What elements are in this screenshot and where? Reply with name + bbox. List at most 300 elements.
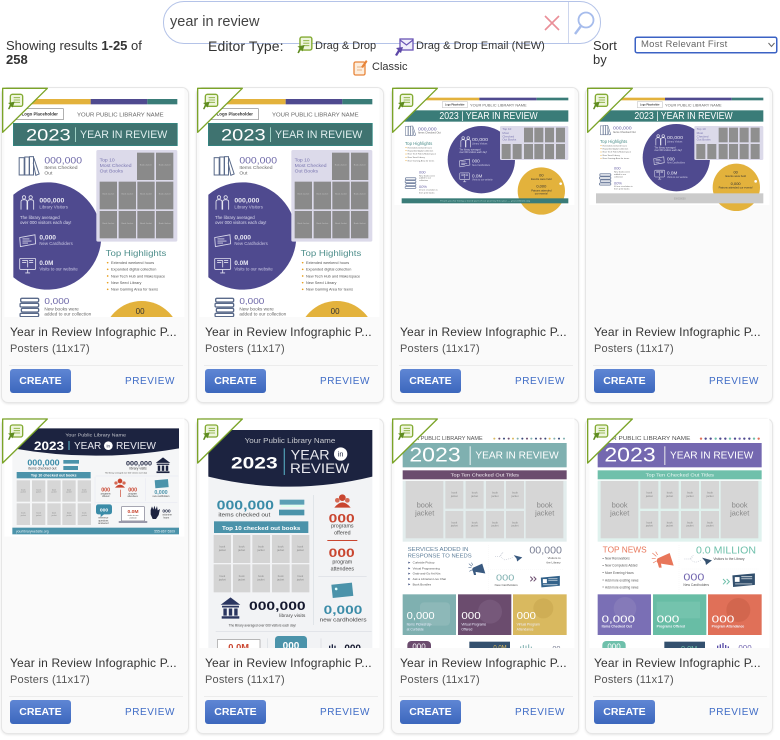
poster thumbnail: our events!	[535, 192, 548, 196]
poster thumbnail: Book Jacket	[297, 222, 310, 225]
create button	[205, 700, 266, 724]
poster thumbnail: YOUR PUBLIC LIBRARY NAME	[403, 436, 483, 442]
preview link: PREVIEW	[125, 376, 175, 387]
poster thumbnail: New Gaming Area for teens	[306, 288, 353, 292]
poster thumbnail: jacket	[20, 514, 26, 517]
poster thumbnail: jacket	[218, 548, 226, 552]
poster thumbnail: Expanded digital collection	[603, 147, 629, 150]
poster thumbnail: YOUR PUBLIC LIBRARY NAME	[77, 112, 164, 118]
sort dropdown	[635, 37, 777, 53]
poster thumbnail: New Cardholders	[667, 162, 686, 165]
poster thumbnail: Events were held	[531, 177, 552, 181]
poster thumbnail: jacket	[686, 494, 694, 498]
poster thumbnail: book	[646, 491, 653, 495]
poster thumbnail: book	[732, 501, 748, 510]
poster thumbnail: book	[82, 489, 86, 491]
poster thumbnail: jacket	[257, 577, 265, 581]
poster thumbnail: book	[21, 513, 25, 515]
poster thumbnail: book	[667, 520, 673, 524]
poster thumbnail: 2023	[26, 125, 71, 144]
poster thumbnail: book	[67, 513, 71, 515]
poster thumbnail	[197, 418, 380, 648]
preview link: PREVIEW	[709, 376, 759, 387]
create button: CREATE	[409, 706, 452, 718]
poster thumbnail: jacket	[450, 524, 458, 528]
poster thumbnail: program	[128, 492, 137, 495]
poster thumbnail: YOUR PUBLIC LIBRARY NAME	[665, 102, 722, 107]
poster thumbnail: 0,000	[239, 296, 265, 306]
search bar	[163, 1, 601, 44]
poster thumbnail: Most Checked	[100, 163, 132, 169]
poster thumbnail: collection	[614, 175, 624, 178]
poster thumbnail: Add more exciting news	[605, 585, 639, 589]
poster thumbnail: New books were	[239, 307, 274, 312]
poster thumbnail: questions	[98, 519, 109, 522]
poster thumbnail: RESPONSE TO NEEDS	[408, 553, 472, 559]
poster thumbnail: 000,000	[27, 458, 60, 467]
poster thumbnail: Book Jacket	[354, 222, 366, 225]
poster thumbnail: offered	[334, 530, 351, 536]
poster thumbnail: Items Checked	[44, 165, 78, 171]
poster thumbnail: Extended weekend hours	[603, 144, 627, 147]
poster thumbnail: Virtual Programming	[413, 566, 440, 570]
poster thumbnail: attendees	[331, 566, 354, 572]
poster thumbnail: Virtual Program	[517, 623, 540, 627]
preview link: PREVIEW	[515, 707, 565, 718]
card 8: purple and mint year in review poster	[586, 419, 772, 733]
poster thumbnail: New Tech Hub and Makerspace	[306, 274, 360, 278]
poster thumbnail: Book Jacket	[159, 193, 171, 196]
poster thumbnail: Most	[697, 131, 703, 135]
poster thumbnail: 000	[667, 156, 675, 161]
poster thumbnail: Top 10 checked out books	[31, 474, 76, 478]
search query text: year in review	[170, 14, 259, 30]
poster thumbnail: Library Visitors	[39, 204, 68, 209]
poster thumbnail: added to our	[419, 177, 431, 180]
poster thumbnail: jacket	[706, 524, 714, 528]
poster thumbnail: The library averaged	[459, 148, 481, 151]
poster thumbnail: Your Public Library Name	[245, 438, 335, 445]
poster thumbnail: 000	[712, 614, 735, 625]
card subtitle: Posters (11x17)	[205, 343, 285, 355]
poster thumbnail: Extended weekend hours	[408, 146, 432, 149]
poster thumbnail: Expanded digital collection	[306, 268, 351, 272]
poster thumbnail: Out	[239, 171, 248, 177]
poster thumbnail: 00	[136, 307, 145, 316]
poster thumbnail: Logo Placeholder	[217, 112, 253, 117]
poster thumbnail: New Seed Library	[603, 154, 621, 157]
poster thumbnail: Virtual Programs	[461, 623, 486, 627]
poster thumbnail: jacket	[470, 494, 478, 498]
poster thumbnail: 0.0M	[234, 260, 248, 267]
poster thumbnail: 00 are circulation is	[614, 185, 633, 188]
icon: clear search	[544, 16, 560, 30]
sort by label: Sort	[593, 38, 617, 53]
poster thumbnail: book	[297, 574, 304, 578]
dropdown value: Most Relevant First	[641, 39, 728, 50]
poster thumbnail: added to our collection	[44, 312, 92, 317]
poster thumbnail: Program Attendance	[712, 625, 744, 629]
poster thumbnail: book	[219, 574, 226, 578]
poster thumbnail: Out Books	[295, 169, 318, 175]
card 7: teal and plum year in review poster	[392, 419, 578, 733]
card title: Year in Review Infographic P...	[205, 325, 372, 339]
poster thumbnail: book	[707, 520, 714, 524]
create button	[10, 700, 71, 724]
poster thumbnail: 000	[472, 159, 480, 164]
poster thumbnail: book	[472, 491, 478, 495]
poster thumbnail: jacket	[609, 509, 629, 518]
poster thumbnail: YEAR IN REVIEW	[275, 129, 363, 141]
poster thumbnail: Thank you for being a loved part of our journey this year — yourwebsite.org	[440, 200, 531, 203]
poster thumbnail: book	[492, 491, 499, 495]
poster thumbnail: 000,000	[126, 460, 152, 467]
poster thumbnail: jacket	[511, 524, 519, 528]
poster thumbnail: jacket	[276, 548, 284, 552]
poster thumbnail: YOUR PUBLIC LIBRARY NAME	[272, 112, 359, 118]
icon: drag and drop	[298, 36, 313, 54]
poster thumbnail: collection	[419, 179, 429, 182]
poster thumbnail: YEAR	[74, 441, 101, 452]
poster thumbnail: 000	[162, 509, 171, 515]
poster thumbnail: in	[107, 443, 111, 448]
poster thumbnail: New Gaming Area for teens	[603, 157, 629, 160]
poster thumbnail: Top 10	[295, 157, 310, 163]
poster thumbnail: Top 10	[697, 127, 706, 131]
poster thumbnail: New Tech Hub & Makerspace	[603, 151, 632, 154]
poster thumbnail: Book Jacket	[335, 164, 347, 167]
poster thumbnail: from print books	[419, 191, 434, 194]
create button: CREATE	[19, 375, 62, 387]
poster thumbnail: Expanded digital collection	[408, 149, 434, 152]
poster thumbnail: new cardholders	[152, 495, 170, 498]
poster thumbnail: jacket	[35, 491, 42, 494]
poster thumbnail: Library Visitors	[234, 204, 263, 209]
card title: Year in Review Infographic P...	[10, 656, 177, 670]
poster thumbnail: Items Checked Out	[418, 131, 441, 135]
poster thumbnail: 0,000	[39, 234, 56, 241]
poster thumbnail: New books were	[44, 307, 79, 312]
card subtitle: Posters (11x17)	[594, 674, 674, 686]
poster thumbnail: Book Jacket	[121, 222, 134, 225]
create button: CREATE	[409, 375, 452, 387]
poster thumbnail: Top Highlights	[600, 139, 627, 144]
poster thumbnail: jacket	[20, 491, 26, 494]
poster thumbnail: 0,000	[324, 603, 363, 617]
poster thumbnail: book	[537, 501, 553, 510]
poster thumbnail: TOP NEWS	[603, 545, 647, 555]
poster thumbnail: Visitors to	[548, 556, 561, 560]
poster thumbnail: Most Checked	[295, 163, 327, 169]
poster thumbnail: jacket	[257, 548, 265, 552]
poster thumbnail: Book Jacket	[354, 193, 366, 196]
poster thumbnail: 0,000	[731, 181, 741, 186]
poster thumbnail: book	[82, 513, 86, 515]
poster thumbnail: book	[707, 491, 714, 495]
drag and drop label: Drag & Drop	[315, 40, 376, 52]
poster thumbnail: hours	[163, 516, 170, 519]
poster thumbnail: Your Public Library Name	[65, 433, 126, 438]
poster thumbnail: YEAR IN REVIEW	[670, 451, 754, 462]
poster thumbnail: 000	[100, 508, 108, 514]
card 5: navy landscape year in review poster	[2, 419, 188, 733]
poster thumbnail: answered	[98, 522, 109, 525]
poster thumbnail: Logo Placeholder	[640, 105, 660, 107]
create button	[10, 369, 71, 393]
poster thumbnail: Book Jacket	[102, 222, 115, 225]
poster thumbnail: Events were held	[725, 174, 746, 178]
poster thumbnail: The library averaged	[20, 215, 60, 220]
poster thumbnail: Book Jacket	[316, 193, 329, 196]
poster thumbnail: Expanded digital collection	[111, 268, 156, 272]
create button	[400, 700, 461, 724]
poster thumbnail: Offered	[461, 627, 473, 631]
poster thumbnail: jacket	[218, 577, 226, 581]
poster thumbnail: Add more exciting news	[605, 578, 639, 582]
poster thumbnail: New Renovations	[605, 556, 630, 560]
poster thumbnail: 2023	[34, 440, 65, 453]
poster thumbnail: Top Highlights	[301, 248, 362, 258]
card title: Year in Review Infographic P...	[400, 325, 567, 339]
poster thumbnail: 555-867-5309	[154, 530, 175, 534]
preview link: PREVIEW	[320, 376, 370, 387]
poster thumbnail: jacket	[665, 494, 673, 498]
create button: CREATE	[214, 375, 257, 387]
poster thumbnail: jacket	[450, 494, 458, 498]
poster thumbnail: 000,000	[44, 156, 82, 166]
results count	[6, 38, 142, 67]
poster thumbnail: Top Highlights	[405, 141, 432, 146]
poster thumbnail: REVIEW	[290, 460, 350, 476]
card subtitle: Posters (11x17)	[400, 343, 480, 355]
poster thumbnail: 0.0M	[127, 509, 139, 515]
poster thumbnail: added to our	[614, 173, 626, 176]
poster thumbnail: Out Books	[502, 137, 517, 141]
poster thumbnail: Top Ten Checked Out Titles	[451, 473, 520, 479]
poster thumbnail: The library averaged	[215, 215, 255, 220]
poster thumbnail: 2023	[604, 445, 656, 467]
poster thumbnail: 0,000	[44, 296, 70, 306]
poster thumbnail: Out Books	[100, 169, 123, 175]
poster thumbnail: over 000 visitors each day!	[654, 149, 682, 152]
poster thumbnail: book	[37, 513, 41, 515]
poster thumbnail: book	[512, 520, 519, 524]
poster thumbnail: Book Jacket	[297, 193, 310, 196]
poster thumbnail: New Cardholders	[234, 241, 268, 246]
poster thumbnail: 00	[331, 307, 340, 316]
poster thumbnail: book	[37, 489, 41, 491]
poster thumbnail: the Library	[547, 560, 561, 564]
card 6: navy portrait year in review poster	[197, 419, 383, 733]
poster thumbnail: jacket	[729, 509, 749, 518]
poster thumbnail: jacket	[491, 494, 499, 498]
card title: Year in Review Infographic P...	[594, 325, 761, 339]
poster thumbnail: Visits to our website	[667, 176, 688, 179]
poster thumbnail: yourlibrarywebsite.org	[16, 530, 49, 534]
poster thumbnail: 000	[128, 487, 137, 493]
poster thumbnail: offered	[102, 495, 110, 498]
poster thumbnail: Items Picked Up-	[407, 623, 432, 627]
poster thumbnail: 0.0 MILLION	[696, 546, 756, 557]
poster thumbnail: New Cardholders	[472, 164, 491, 167]
poster thumbnail: jacket	[686, 524, 694, 528]
poster thumbnail: 2023 | YEAR IN REVIEW	[439, 111, 538, 122]
poster thumbnail: jacket	[296, 577, 304, 581]
poster thumbnail: Items Checked Out	[602, 625, 633, 629]
poster thumbnail: book	[612, 501, 628, 510]
poster thumbnail: Top Highlights	[106, 248, 167, 258]
poster thumbnail: 000,000	[239, 156, 277, 166]
card title: Year in Review Infographic P...	[400, 656, 567, 670]
poster thumbnail	[587, 88, 770, 211]
poster thumbnail: YEAR IN REVIEW	[80, 129, 168, 141]
template type ribbon	[198, 419, 242, 463]
poster thumbnail: Book Jacket	[159, 222, 171, 225]
poster thumbnail: book	[646, 520, 653, 524]
poster thumbnail: 0,000	[234, 234, 251, 241]
create button	[400, 369, 461, 393]
poster thumbnail: over 000 visitors each day!	[20, 220, 71, 225]
poster thumbnail: Top 10 checked out books	[222, 526, 300, 532]
poster thumbnail: book	[67, 489, 71, 491]
poster thumbnail: Logo Placeholder	[445, 105, 465, 107]
poster thumbnail: programs	[331, 524, 354, 530]
template type ribbon	[3, 88, 47, 132]
icon: chevron	[768, 42, 775, 48]
poster thumbnail	[392, 88, 568, 215]
poster thumbnail: 000	[614, 166, 621, 171]
poster thumbnail: program	[332, 560, 353, 566]
template type ribbon	[393, 88, 437, 132]
poster thumbnail: New books were	[614, 171, 631, 174]
poster thumbnail: book	[451, 520, 458, 524]
poster thumbnail: Book Jacket	[354, 164, 366, 167]
poster thumbnail: items checked out	[28, 466, 56, 470]
poster thumbnail: book	[472, 520, 478, 524]
poster thumbnail: Top 10	[502, 127, 512, 131]
poster thumbnail: Curbside Pickup	[413, 561, 435, 565]
poster thumbnail: Visits to our website	[39, 266, 78, 271]
poster thumbnail: 000000000	[674, 198, 686, 200]
poster thumbnail: 0.0M	[472, 173, 482, 178]
poster thumbnail: website	[129, 517, 137, 520]
poster thumbnail: The library averaged over 000 visitors each day!	[105, 472, 148, 475]
icon: classic editor	[353, 60, 368, 76]
poster thumbnail: 000	[329, 546, 355, 560]
poster thumbnail: added to our collection	[239, 312, 287, 317]
editor type label: Editor Type:	[208, 38, 284, 54]
poster thumbnail: jacket	[81, 514, 87, 517]
create button: CREATE	[214, 706, 257, 718]
poster thumbnail: Extended weekend hours	[306, 261, 349, 265]
poster thumbnail: Book Jacket	[140, 222, 152, 225]
poster thumbnail: New books were	[419, 174, 436, 177]
poster thumbnail: REVIEW	[116, 441, 157, 452]
poster thumbnail: 000,000	[249, 599, 306, 613]
preview link: PREVIEW	[515, 376, 565, 387]
poster thumbnail: jacket	[276, 577, 284, 581]
poster thumbnail: 000	[461, 611, 481, 622]
poster thumbnail: New Tech Hub and Makerspace	[111, 274, 165, 278]
create button: CREATE	[19, 706, 62, 718]
sort by label: by	[593, 52, 607, 67]
poster thumbnail: at Curbside	[407, 627, 424, 631]
poster thumbnail: book	[278, 545, 284, 549]
poster thumbnail: new cardholders	[320, 618, 367, 624]
results count: Showing results 1-25 of	[6, 38, 142, 53]
poster thumbnail: New Seed Library	[408, 156, 426, 159]
poster thumbnail: 000	[496, 573, 515, 583]
poster thumbnail: 00,000	[529, 546, 562, 557]
poster thumbnail: 0,000	[407, 611, 435, 622]
poster thumbnail: Book Jacket	[335, 193, 347, 196]
template type ribbon	[588, 88, 632, 132]
poster thumbnail: book	[417, 501, 433, 510]
poster thumbnail: book	[219, 545, 226, 549]
poster thumbnail: programs	[101, 492, 111, 495]
poster thumbnail: 00%	[419, 184, 427, 189]
poster thumbnail: Visitors to the Library	[713, 557, 745, 561]
poster thumbnail: New Computers Added	[605, 564, 638, 568]
card 1: year in review poster	[2, 88, 188, 402]
template type ribbon	[198, 88, 242, 132]
poster thumbnail: 2023	[409, 445, 461, 467]
poster thumbnail: over 000 visitors each day!	[215, 220, 266, 225]
poster thumbnail: book	[52, 489, 56, 491]
poster thumbnail	[197, 88, 373, 317]
poster thumbnail: 00 are circulation is	[419, 189, 438, 192]
card subtitle: Posters (11x17)	[400, 674, 480, 686]
poster thumbnail: Items Checked Out	[613, 130, 636, 134]
poster thumbnail: 000	[657, 614, 680, 625]
poster thumbnail: Grab-and-Go Art Kits	[413, 572, 441, 576]
poster thumbnail: book	[512, 491, 519, 495]
icon: search magnifier	[568, 2, 594, 43]
poster thumbnail: Most	[502, 131, 509, 135]
card subtitle: Posters (11x17)	[10, 343, 90, 355]
poster thumbnail: jacket	[470, 524, 478, 528]
card title: Year in Review Infographic P...	[205, 656, 372, 670]
poster thumbnail	[2, 418, 184, 534]
poster thumbnail: 00	[733, 170, 739, 175]
create button: CREATE	[603, 375, 646, 387]
poster thumbnail: YOUR PUBLIC LIBRARY NAME	[598, 436, 691, 442]
poster thumbnail: Library Visitors	[472, 142, 488, 145]
poster thumbnail: jacket	[50, 491, 57, 494]
poster thumbnail: 000,000	[418, 126, 437, 131]
poster thumbnail: Out	[44, 171, 53, 177]
poster thumbnail: YEAR IN REVIEW	[475, 451, 559, 462]
poster thumbnail: Logo Placeholder	[22, 112, 58, 117]
poster thumbnail: Patrons attended	[531, 188, 552, 192]
poster thumbnail: The library averaged	[654, 146, 676, 149]
poster thumbnail: jacket	[237, 548, 245, 552]
poster thumbnail: Book Jacket	[140, 164, 152, 167]
poster thumbnail: Book Jacket	[102, 193, 115, 196]
poster thumbnail: 000	[419, 169, 426, 174]
poster thumbnail: from print books	[614, 188, 629, 191]
poster thumbnail: book	[278, 574, 284, 578]
poster thumbnail: Patrons attended our events!	[719, 186, 753, 190]
poster thumbnail: over 000 visitors each day!	[459, 151, 487, 154]
poster thumbnail: YEAR	[291, 446, 330, 462]
poster thumbnail: Book Jacket	[335, 222, 347, 225]
poster thumbnail: jacket	[35, 514, 42, 517]
poster thumbnail: Book Jacket	[140, 193, 152, 196]
poster thumbnail: SERVICES ADDED IN	[408, 547, 468, 553]
poster thumbnail: New Seed Library	[306, 281, 337, 285]
poster thumbnail: 2023 | YEAR IN REVIEW	[634, 111, 733, 122]
